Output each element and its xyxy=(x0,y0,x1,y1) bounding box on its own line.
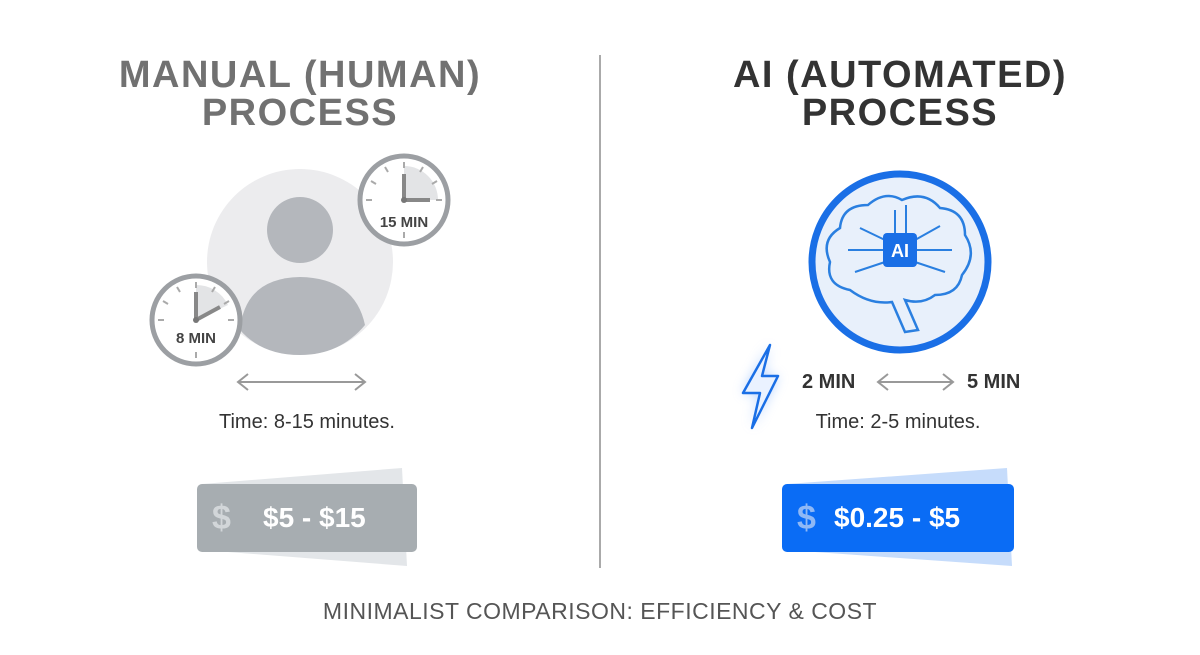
arrow: left range xyxy=(238,374,365,390)
title: AI: AI (AUTOMATED) xyxy=(733,54,1067,96)
title: AI xyxy=(733,54,1067,134)
cost: manual: $5 - $15 xyxy=(263,502,366,533)
icon: AI brain: AI xyxy=(891,241,909,261)
label: 5 MIN: 5 MIN xyxy=(967,371,1020,393)
icon: clock 8 min: 8 MIN xyxy=(176,330,216,347)
title: manual: PROCESS xyxy=(202,92,398,134)
icon: clock 8 min xyxy=(152,276,240,364)
title: manual: MANUAL (HUMAN) xyxy=(119,54,481,96)
label: 2 MIN: 2 MIN xyxy=(802,371,855,393)
footer caption: MINIMALIST COMPARISON: EFFICIENCY & COST xyxy=(323,598,877,624)
icon: person xyxy=(207,169,393,355)
title: AI: PROCESS xyxy=(802,92,998,134)
arrow: right range xyxy=(878,374,953,390)
title: manual xyxy=(119,54,481,134)
icon: clock 15 min xyxy=(360,156,448,244)
cost: AI: $ xyxy=(797,499,816,537)
illustration: manual xyxy=(150,154,450,391)
divider xyxy=(599,55,601,568)
cost: manual xyxy=(197,468,417,566)
illustration: AI xyxy=(740,170,992,430)
icon: AI brain xyxy=(812,174,988,350)
text: AI time: Time: 2-5 minutes. xyxy=(816,411,980,433)
cost: AI: $0.25 - $5 xyxy=(834,502,960,533)
text: manual time: Time: 8-15 minutes. xyxy=(219,411,395,433)
icon: lightning xyxy=(743,345,778,428)
cost: AI xyxy=(782,468,1014,566)
cost: manual: $ xyxy=(212,499,231,537)
icon: clock 15 min: 15 MIN xyxy=(380,214,428,231)
